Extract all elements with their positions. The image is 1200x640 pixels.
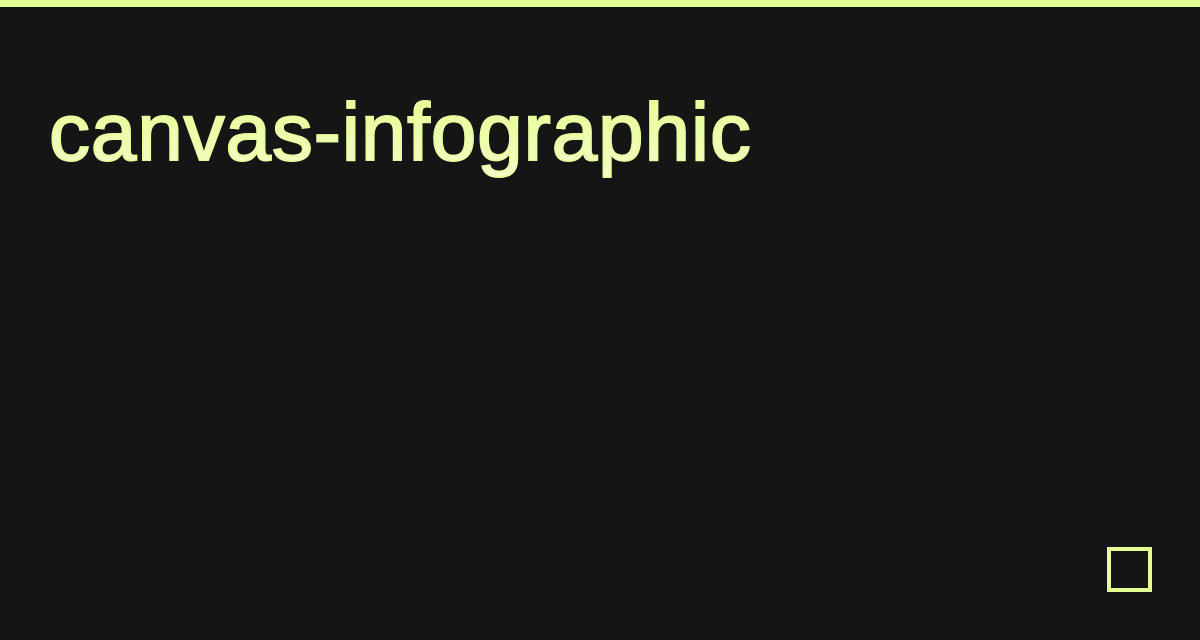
top accent bar — [0, 0, 1200, 7]
icon: outlined square — [1107, 547, 1152, 592]
title: canvas-infographic — [49, 87, 752, 178]
